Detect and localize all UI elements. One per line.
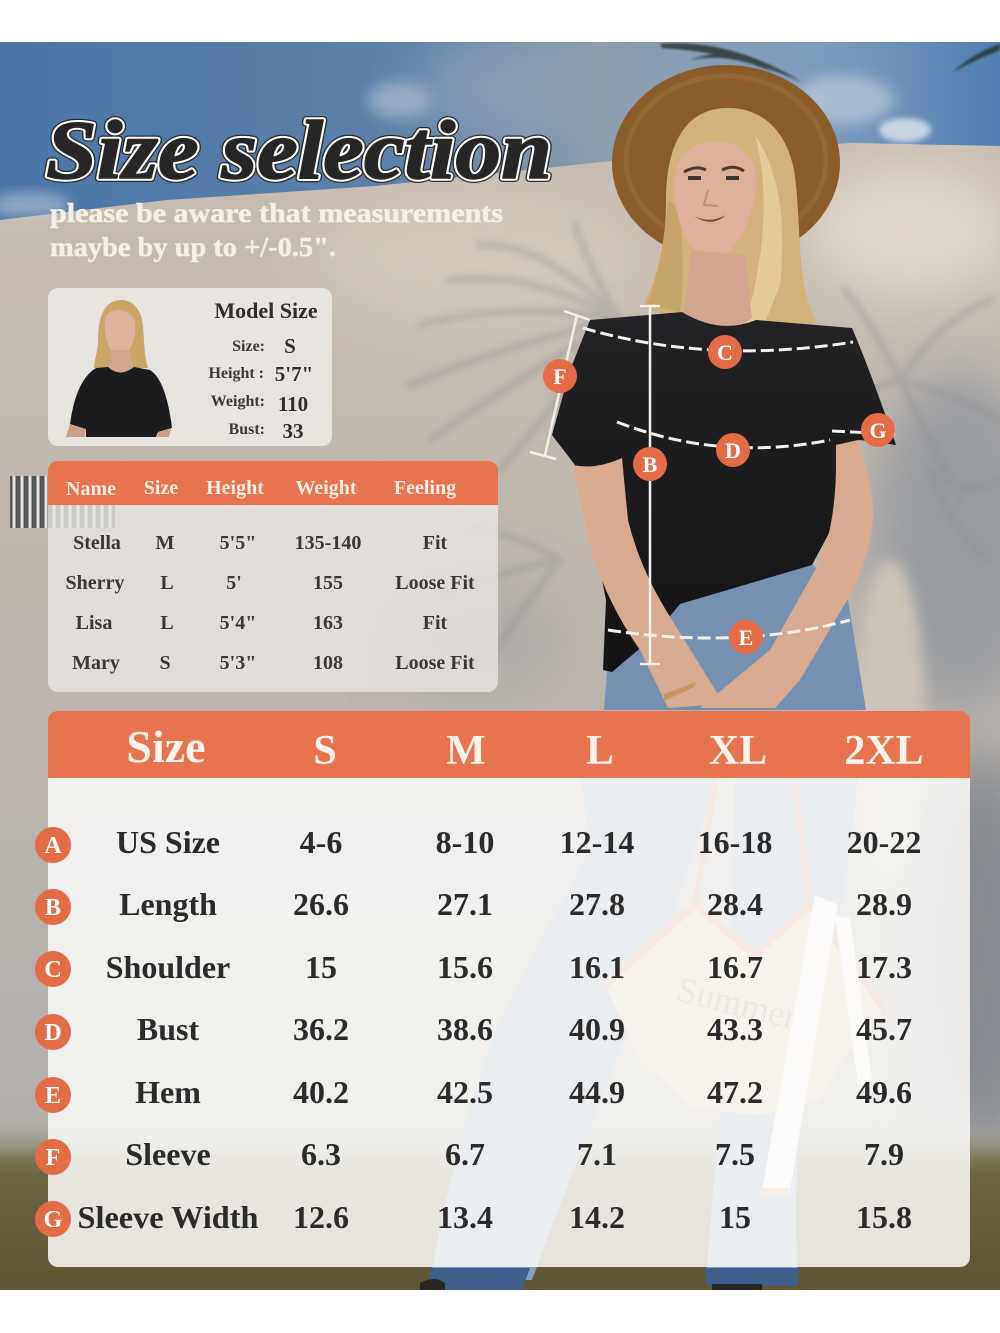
model photo — [66, 300, 172, 437]
wearer rows: 5' — [226, 572, 242, 594]
row D: Bust: Bust — [137, 1011, 199, 1047]
wearer rows: Fit — [423, 612, 448, 634]
size chart header: L — [586, 728, 614, 774]
wearer table header — [48, 461, 498, 505]
row C: Shoulder: 17.3 — [856, 949, 912, 985]
wearer rows: S — [159, 652, 171, 674]
row B: Length: 27.1 — [437, 886, 493, 922]
measurement markers: E — [739, 625, 753, 650]
subtitle: maybe by up to +/-0.5". — [50, 232, 336, 262]
row B: Length: 28.4 — [707, 886, 763, 922]
row G: Sleeve Width: G — [44, 1207, 63, 1233]
wearer rows: 5'5" — [220, 532, 256, 554]
wearer rows: Mary — [72, 652, 120, 674]
wearer table header: Feeling — [394, 477, 456, 499]
wearer rows: L — [160, 612, 174, 634]
measurement markers: G — [869, 418, 887, 443]
panel: model size: S — [284, 334, 296, 358]
wearer table header: Weight — [295, 477, 357, 499]
hair — [642, 108, 816, 338]
measurement markers: B — [643, 452, 658, 477]
wearer rows: Lisa — [76, 612, 112, 634]
row G: Sleeve Width: 13.4 — [437, 1199, 493, 1235]
row A: US Size: US Size — [116, 824, 220, 860]
row B: Length: Length — [119, 886, 217, 922]
row F: Sleeve — [35, 1136, 904, 1175]
wearer rows: M — [156, 532, 175, 554]
wearer rows: Loose Fit — [395, 572, 475, 594]
row C: Shoulder: 16.7 — [707, 949, 763, 985]
wearer rows: 5'3" — [220, 652, 256, 674]
panel: wearer feedback table — [48, 461, 498, 692]
row D: Bust: 43.3 — [707, 1011, 763, 1047]
measurement markers: D — [725, 438, 741, 463]
woman legs and bag behind table: Summer — [673, 969, 801, 1037]
row B: Length: 26.6 — [293, 886, 349, 922]
subtitle — [50, 198, 503, 262]
row D: Bust: D — [44, 1020, 62, 1046]
row A: US Size: A — [44, 833, 62, 859]
row D: Bust: 45.7 — [856, 1011, 912, 1047]
row G: Sleeve Width: 14.2 — [569, 1199, 625, 1235]
row E: Hem: 49.6 — [856, 1074, 912, 1110]
row B: Length: B — [45, 895, 61, 921]
row G: Sleeve Width — [35, 1199, 912, 1237]
wearer rows: 108 — [313, 652, 343, 674]
wearer rows: Loose Fit — [395, 652, 475, 674]
row A: US Size: 20-22 — [847, 824, 921, 860]
measurement markers: C — [717, 340, 733, 365]
row G: Sleeve Width: 12.6 — [293, 1199, 349, 1235]
row E: Hem — [35, 1074, 912, 1113]
row F: Sleeve: 7.1 — [577, 1136, 617, 1172]
row E: Hem: 40.2 — [293, 1074, 349, 1110]
row F: Sleeve: F — [46, 1145, 60, 1171]
wearer table header: Height — [206, 477, 264, 499]
panel: model size: Size: — [232, 338, 265, 355]
row C: Shoulder — [35, 949, 912, 987]
title: Size selection — [46, 104, 552, 197]
wearer rows — [66, 532, 475, 674]
row B: Length: 28.9 — [856, 886, 912, 922]
row G: Sleeve Width: 15 — [719, 1199, 751, 1235]
row G: Sleeve Width: 15.8 — [856, 1199, 912, 1235]
row E: Hem: 44.9 — [569, 1074, 625, 1110]
row E: Hem: E — [45, 1083, 61, 1109]
row D: Bust: 36.2 — [293, 1011, 349, 1047]
wearer rows: 135-140 — [295, 532, 361, 554]
subtitle: please be aware that measurements — [50, 198, 503, 228]
measurement lines — [530, 306, 895, 664]
size chart header: M — [446, 728, 486, 774]
jeans — [604, 562, 866, 710]
size chart header — [48, 711, 970, 778]
row F: Sleeve: 6.3 — [301, 1136, 341, 1172]
measurement markers — [543, 335, 895, 654]
row F: Sleeve: 6.7 — [445, 1136, 485, 1172]
row E: Hem: Hem — [135, 1074, 201, 1110]
wearer rows: Fit — [423, 532, 448, 554]
row A: US Size: 12-14 — [560, 824, 634, 860]
row D: Bust — [35, 1011, 912, 1050]
panel: size chart — [35, 711, 970, 1267]
panel: model size: 33 — [282, 419, 304, 443]
row G: Sleeve Width: Sleeve Width — [78, 1199, 259, 1235]
woman legs and bag behind table — [420, 770, 885, 1290]
panel: model size: Height : — [208, 365, 264, 382]
row E: Hem: 47.2 — [707, 1074, 763, 1110]
row F: Sleeve: Sleeve — [125, 1136, 211, 1172]
row D: Bust: 40.9 — [569, 1011, 625, 1047]
face — [674, 141, 756, 265]
panel: model size: 110 — [278, 392, 308, 416]
wearer rows: 163 — [313, 612, 343, 634]
size chart header: S — [313, 728, 337, 774]
wearer rows: Sherry — [66, 572, 124, 594]
wearer rows: 155 — [313, 572, 343, 594]
size chart header: XL — [709, 728, 767, 774]
wearer table header: Size — [144, 477, 178, 499]
row C: Shoulder: 15 — [305, 949, 337, 985]
row B: Length: 27.8 — [569, 886, 625, 922]
row C: Shoulder: Shoulder — [106, 949, 230, 985]
neck — [684, 250, 752, 330]
hat — [612, 65, 840, 261]
panel: model size: Model Size — [214, 298, 318, 323]
row C: Shoulder: C — [44, 957, 62, 983]
panel: model size: 5'7" — [275, 362, 313, 386]
wearer rows: Stella — [73, 532, 121, 554]
row A: US Size: 8-10 — [436, 824, 494, 860]
size chart header: Size — [126, 721, 206, 772]
title: Size selection — [46, 104, 552, 197]
row F: Sleeve: 7.5 — [715, 1136, 755, 1172]
row D: Bust: 38.6 — [437, 1011, 493, 1047]
panel: model size: Bust: — [229, 421, 265, 438]
title: Size selection — [46, 104, 552, 197]
woman upper body — [552, 65, 896, 710]
row B: Length — [35, 886, 912, 925]
row F: Sleeve: 7.9 — [864, 1136, 904, 1172]
row A: US Size: 4-6 — [300, 824, 342, 860]
arms — [573, 440, 873, 708]
row E: Hem: 42.5 — [437, 1074, 493, 1110]
row C: Shoulder: 16.1 — [569, 949, 625, 985]
row A: US Size — [35, 824, 921, 863]
wearer table header: Name — [66, 478, 116, 500]
row C: Shoulder: 15.6 — [437, 949, 493, 985]
measurement markers: F — [553, 364, 567, 389]
shirt — [552, 312, 896, 672]
wearer rows: L — [160, 572, 174, 594]
wearer rows: 5'4" — [220, 612, 256, 634]
panel: model size: Weight: — [211, 393, 265, 410]
row A: US Size: 16-18 — [698, 824, 772, 860]
panel: model size — [48, 288, 332, 446]
size chart header: 2XL — [844, 728, 924, 774]
